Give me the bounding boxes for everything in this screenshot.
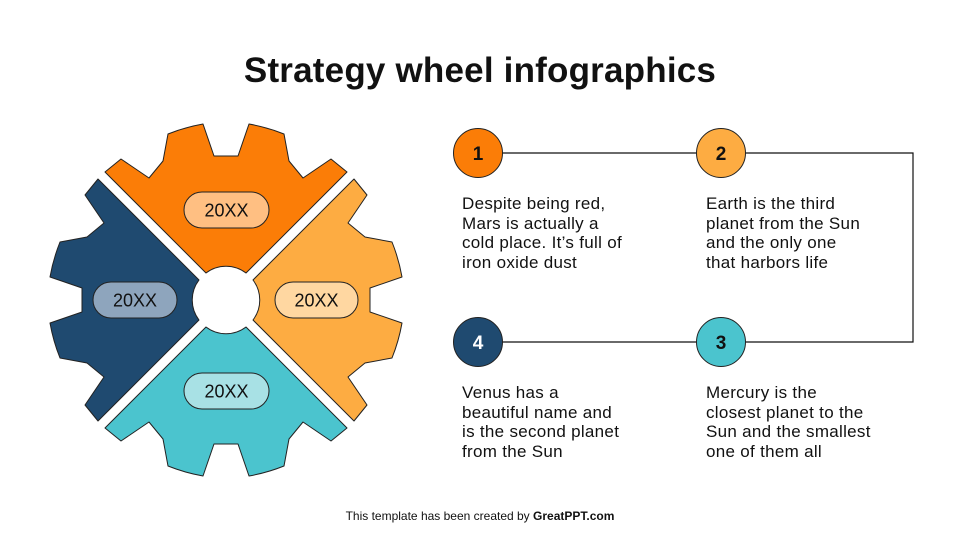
gear segment: right light orange — [253, 179, 402, 421]
text: step 1: Despite being red, — [462, 194, 605, 213]
connector lines — [478, 153, 913, 342]
text: step 1 — [462, 194, 622, 272]
text: step 2: and the only one — [706, 233, 837, 252]
text: step 3: one of them all — [706, 442, 822, 460]
text: step 2: planet from the Sun — [706, 214, 860, 232]
title: Strategy wheel infographics — [244, 51, 716, 90]
text: step 4: beautiful name and — [462, 402, 612, 422]
pill: right 20XX: 20XX — [294, 290, 339, 310]
step circle 2 — [696, 128, 746, 178]
gear segment: left dark blue — [50, 179, 199, 421]
pill: top 20XX: 20XX — [204, 200, 249, 220]
step circle 1: 1 — [473, 144, 484, 165]
text: step 2 — [706, 194, 860, 272]
gear segment: top orange — [105, 124, 347, 273]
step circle 3: 3 — [716, 333, 726, 354]
text: step 4: Venus has a — [462, 383, 559, 402]
text: step 4 — [462, 383, 619, 460]
footer: This template has been created by GreatPPT.com — [346, 509, 614, 523]
pill: left 20XX: 20XX — [113, 290, 157, 310]
text: step 4: from the Sun — [462, 442, 563, 460]
pill: top 20XX — [184, 192, 269, 228]
step circle 4: 4 — [473, 333, 484, 354]
text: step 4: is the second planet — [462, 422, 619, 441]
pill: left 20XX — [93, 282, 177, 318]
text: step 3: Sun and the smallest — [706, 422, 871, 441]
text: step 1: Mars is actually a — [462, 214, 599, 232]
pill: bottom 20XX — [184, 373, 269, 409]
step circle 4 — [454, 318, 502, 366]
gear segment: bottom teal — [105, 327, 347, 476]
text: step 3: closest planet to the — [706, 402, 864, 422]
text: step 1: cold place. It’s full of — [462, 233, 622, 252]
text: step 3 — [706, 383, 871, 460]
text: step 2: Earth is the third — [706, 194, 835, 213]
step circle 1 — [454, 128, 502, 178]
step circle 3 — [696, 318, 746, 366]
pill: right 20XX — [275, 282, 358, 318]
text: step 2: that harbors life — [706, 252, 828, 272]
pill: bottom 20XX: 20XX — [204, 382, 249, 402]
text: step 3: Mercury is the — [706, 383, 817, 402]
step circle 2: 2 — [716, 144, 726, 165]
text: step 1: iron oxide dust — [462, 252, 577, 272]
